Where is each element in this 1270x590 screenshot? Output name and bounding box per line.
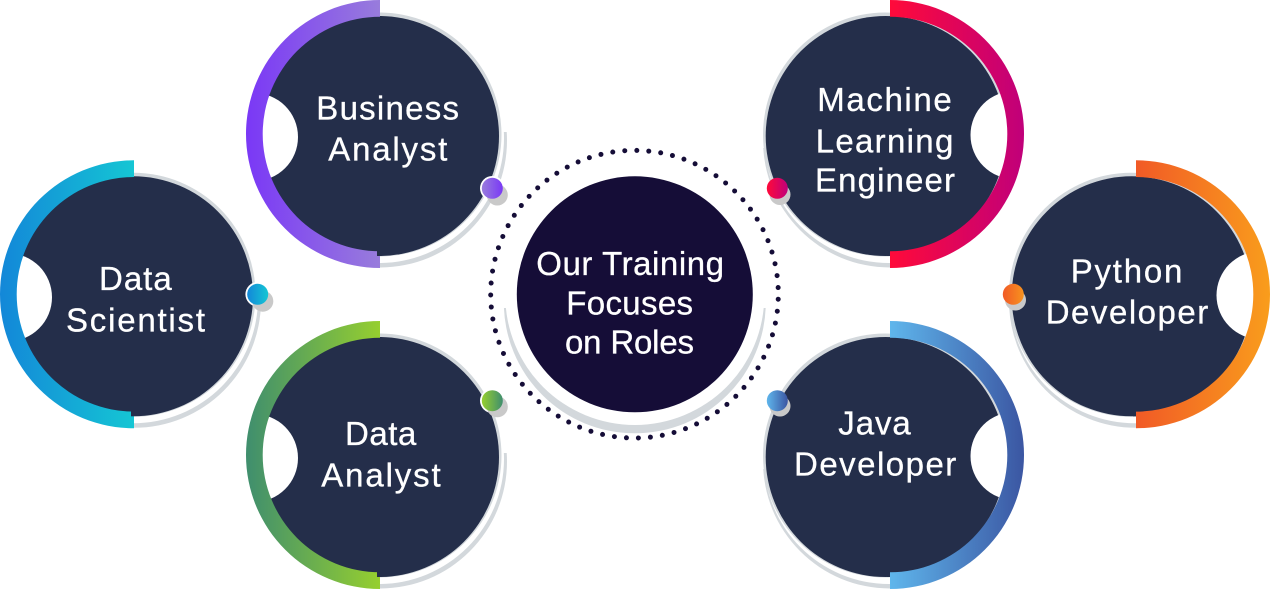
ring: data analyst: [246, 321, 380, 589]
title: Our Training: [536, 245, 724, 282]
crescent shadow: [504, 308, 766, 434]
icon: data scientist dot: [245, 282, 273, 312]
ring: business analyst: [246, 0, 380, 268]
label: data scientist: Scientist: [66, 302, 205, 339]
center circle: [517, 176, 753, 412]
panel: central hub: [486, 145, 783, 443]
label: data scientist: Data: [99, 260, 172, 297]
dotted ring: [486, 145, 783, 443]
label: data scientist: [66, 260, 205, 339]
label: java developer: Developer: [794, 446, 956, 483]
label: machine learning engineer: Learning: [816, 122, 953, 159]
label: business analyst: [316, 89, 459, 168]
panel: machine learning engineer: [763, 0, 1024, 268]
icon: machine learning engineer dot: [767, 178, 790, 205]
label: python developer: Developer: [1046, 293, 1208, 330]
panel: java developer: [763, 321, 1024, 589]
label: python developer: [1046, 253, 1208, 330]
panel: business analyst: [246, 0, 508, 268]
title: Focuses: [566, 284, 693, 321]
label: data analyst: Analyst: [321, 457, 441, 494]
panel: data scientist: [0, 160, 273, 428]
ring: machine learning engineer: [890, 0, 1024, 268]
label: business analyst: Analyst: [328, 131, 447, 168]
ring: python developer: [1136, 160, 1270, 428]
panel: data analyst: [246, 321, 508, 589]
label: business analyst: Business: [316, 89, 459, 126]
panel: python developer: [1003, 160, 1270, 428]
label: machine learning engineer: [815, 81, 955, 199]
title: on Roles: [565, 323, 694, 360]
ring: data scientist: [0, 160, 134, 428]
label: python developer: Python: [1071, 253, 1182, 290]
label: machine learning engineer: Engineer: [815, 162, 955, 199]
ring: java developer: [890, 321, 1024, 589]
icon: data analyst dot: [480, 388, 508, 417]
label: java developer: Java: [838, 404, 911, 441]
label: data analyst: Data: [345, 415, 417, 452]
icon: java developer dot: [767, 390, 790, 416]
icon: business analyst dot: [480, 176, 508, 206]
title: [536, 245, 724, 360]
label: machine learning engineer: Machine: [817, 81, 952, 118]
label: data analyst: [321, 415, 441, 494]
label: java developer: [794, 404, 956, 483]
icon: python developer dot: [1003, 284, 1026, 310]
